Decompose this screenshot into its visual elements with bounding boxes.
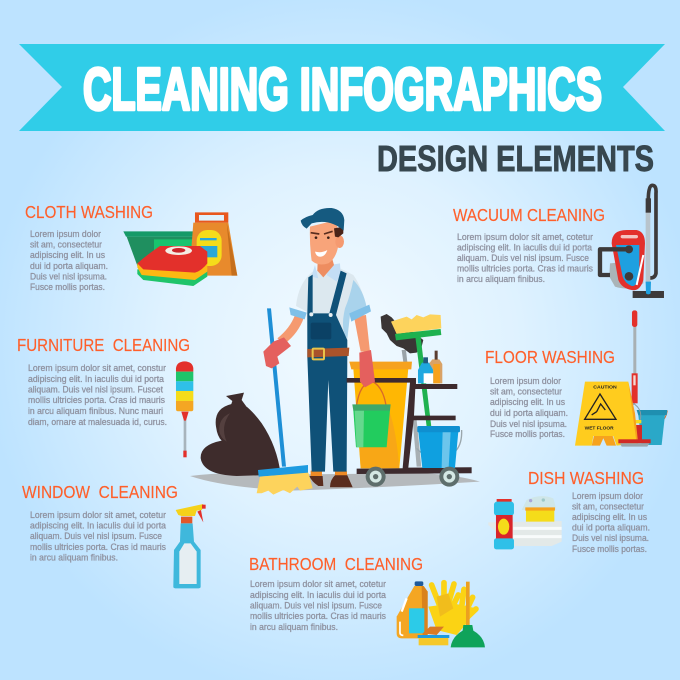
heading: furniture cleaning: FURNITURE CLEANING xyxy=(17,335,190,355)
icon: mop, bucket and wet floor sign: CAUTION xyxy=(593,384,617,389)
heading: dish washing: DISH WASHING xyxy=(528,468,644,488)
text block: floor washing: Lorem ipsum dolor xyxy=(490,376,561,386)
heading: floor washing: FLOOR WASHING xyxy=(485,347,615,367)
text block: furniture cleaning: adipiscing elit. In iaculis dui id porta xyxy=(28,374,164,384)
text block: bathroom cleaning: in arcu aliquam finibus. xyxy=(250,622,338,632)
text block: wacuum cleaning: Lorem ipsum dolor sit amet, cotetur xyxy=(457,232,593,242)
text block: dish washing: adipiscing elit. In us xyxy=(572,512,647,522)
yellow bin xyxy=(353,368,408,468)
panel: window cleaning xyxy=(22,482,206,588)
panel: cloth washing xyxy=(25,202,237,292)
heading: window cleaning: WINDOW CLEANING xyxy=(22,482,178,502)
belt xyxy=(307,348,349,357)
text block: cloth washing: Lorem ipsum dolor xyxy=(30,229,101,239)
text block: wacuum cleaning xyxy=(457,232,593,284)
text block: dish washing: Fusce mollis portas. xyxy=(572,544,647,554)
text block: furniture cleaning: mollis ultricies porta. Cras id mauris xyxy=(28,395,165,405)
green bucket xyxy=(352,382,391,447)
text block: furniture cleaning: diam, ornare at malesuada id, curus. xyxy=(28,417,167,427)
text block: dish washing: Duis vel nisl ipsuma. xyxy=(572,533,649,543)
icon: basin, detergent and folded clothes xyxy=(123,212,237,286)
text block: dish washing: dui id porta aliquam. xyxy=(572,522,650,532)
dark mop xyxy=(381,314,423,353)
text block: window cleaning: adipiscing elit. In iaculis dui id porta xyxy=(30,520,166,530)
cap xyxy=(301,208,344,231)
icon: mop, bucket and wet floor sign xyxy=(575,310,667,447)
cleaning cart xyxy=(347,314,472,487)
cart frame xyxy=(347,378,472,474)
text block: furniture cleaning xyxy=(28,363,167,427)
text block: floor washing: Fusce mollis portas. xyxy=(490,429,565,439)
heading: wacuum cleaning: WACUUM CLEANING xyxy=(453,205,605,225)
text block: dish washing: Lorem ipsum dolor xyxy=(572,491,643,501)
socks and shoes xyxy=(309,471,353,487)
text block: bathroom cleaning: adipiscing elit. In iaculis dui id porta xyxy=(250,590,386,600)
text block: furniture cleaning: aliquam. Duis vel nisl ipsum. Fuscet xyxy=(28,384,163,394)
title banner xyxy=(19,44,665,131)
floor shadow xyxy=(190,473,480,491)
heading: cloth washing: CLOTH WASHING xyxy=(25,202,153,222)
panel: wacuum cleaning xyxy=(453,185,664,298)
text block: cloth washing: dui id porta aliquam. xyxy=(30,261,108,271)
text block: window cleaning: Lorem ipsum dolor sit amet, cotetur xyxy=(30,510,166,520)
janitor figure xyxy=(263,208,371,487)
text block: dish washing xyxy=(572,491,650,554)
text block: dish washing: sit am, consectetur xyxy=(572,502,644,512)
icon: dish soap, plates and sponge xyxy=(488,496,562,549)
panel: bathroom cleaning xyxy=(249,554,485,647)
text block: cloth washing: Fusce mollis portas. xyxy=(30,282,105,292)
heading: bathroom cleaning: BATHROOM CLEANING xyxy=(249,554,423,574)
text block: bathroom cleaning xyxy=(250,579,386,632)
icon: feather duster xyxy=(176,361,193,457)
right glove holding bucket xyxy=(359,350,375,387)
left glove xyxy=(263,337,291,368)
shirt xyxy=(296,267,367,340)
icon: spray bottle xyxy=(173,504,206,588)
text block: bathroom cleaning: Lorem ipsum dolor sit amet, cotetur xyxy=(250,579,386,589)
text block: floor washing: adipiscing elit. In us xyxy=(490,397,565,407)
panel: floor washing xyxy=(485,310,667,447)
text block: window cleaning: aliquam. Duis vel nisl ipsum. Fusce xyxy=(30,531,162,541)
head xyxy=(310,220,339,265)
text block: floor washing: Duis vel nisl ipsuma. xyxy=(490,419,567,429)
icon: vacuum cleaner xyxy=(600,185,664,298)
text block: bathroom cleaning: mollis ultricies porta. Cras id mauris xyxy=(250,611,386,621)
text block: window cleaning: in arcu aliquam finibus. xyxy=(30,552,118,562)
overalls xyxy=(307,271,347,472)
arms xyxy=(277,315,304,343)
icon: mop, bucket and wet floor sign: WET FLOOR xyxy=(585,425,615,430)
text block: window cleaning: mollis ultricies porta. Cras id mauris xyxy=(30,542,166,552)
blue bucket xyxy=(417,426,462,468)
text block: wacuum cleaning: in arcu aliquam finibus. xyxy=(457,274,545,284)
text block: floor washing xyxy=(490,376,568,439)
text block: bathroom cleaning: aliquam. Duis vel nisl ipsum. Fusce xyxy=(250,600,382,610)
text block: furniture cleaning: in arcu aliquam finibus. Nunc mauri xyxy=(28,406,163,416)
icon: push broom xyxy=(257,308,313,495)
text block: wacuum cleaning: aliquam. Duis vel nisl ipsum. Fusce xyxy=(457,253,589,263)
text block: window cleaning xyxy=(30,510,166,562)
panel: central janitor and cart illustration xyxy=(190,208,480,495)
text block: wacuum cleaning: adipiscing elit. In iaculis dui id porta xyxy=(457,242,592,252)
text block: floor washing: sit am, consectetur xyxy=(490,386,562,396)
text block: cloth washing: Duis vel nisl ipsuma. xyxy=(30,272,107,282)
text block: cloth washing xyxy=(30,229,108,292)
panel: dish washing xyxy=(488,468,650,554)
text block: furniture cleaning: Lorem ipsum dolor sit amet, constur xyxy=(28,363,166,373)
text block: wacuum cleaning: mollis ultricies porta. Cras id mauris xyxy=(457,264,593,274)
panel: furniture cleaning xyxy=(17,335,193,457)
wheels xyxy=(366,467,459,487)
text block: cloth washing: adipiscing elit. In us xyxy=(30,250,105,260)
spray bottles xyxy=(418,351,442,383)
neck xyxy=(317,257,334,277)
green broom xyxy=(415,337,431,427)
text block: floor washing: dui id porta aliquam. xyxy=(490,408,568,418)
text block: cloth washing: sit am, consectetur xyxy=(30,240,102,250)
icon: bathroom supplies xyxy=(397,581,485,647)
icon: garbage bag xyxy=(201,393,281,476)
